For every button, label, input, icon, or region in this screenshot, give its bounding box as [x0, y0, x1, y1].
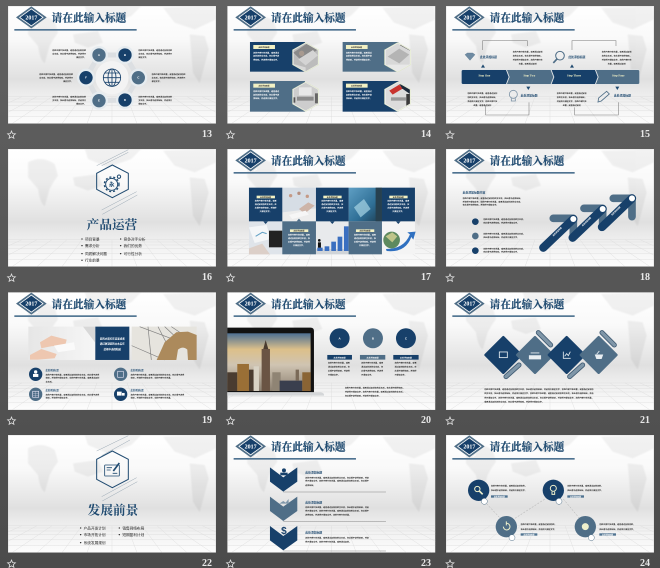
card 4: 择粘贴，并选择只保留文字。 — [346, 96, 372, 100]
text tiles: 只保留文字。 — [293, 243, 305, 247]
column labels and text: 通过复制您的文本后，在 — [395, 365, 416, 369]
text blocks: 此处添加标题 — [570, 494, 581, 498]
text blocks: 此处添加标题 — [305, 500, 322, 504]
card 4: 此处添加标题 — [351, 84, 362, 88]
bullet list: 销售网络布局 — [122, 525, 145, 530]
decorative hexagon — [97, 436, 137, 501]
text blocks: 在此框中选择粘贴，并选择只保留文字。 — [599, 527, 635, 531]
text blocks: 您的内容打在这里，或者通过复制您的 — [138, 48, 172, 52]
slide 20: laptop with city photo — [181, 292, 481, 410]
four items: 您的内容打在这里，或者通过复制您的文本后，在此框中选择 — [131, 372, 184, 376]
circles — [468, 480, 596, 541]
text tiles — [249, 188, 415, 254]
column labels and text: 您的内容打在这里，或者 — [361, 361, 383, 365]
text blocks: 此处添加标题 — [568, 55, 585, 59]
slide header — [452, 149, 575, 174]
text blocks: 您的内容打在这里，或者通过复制您的文本后，在此框中选择粘贴，并选 — [305, 475, 369, 479]
intro text: 此处添加标题内容 — [463, 190, 485, 194]
column labels and text: 通过复制您的文本后，在 — [328, 365, 350, 369]
diamond icons — [499, 351, 603, 359]
hexagon ring diagram: A — [98, 53, 101, 57]
footer row 2: stars and page numbers — [8, 272, 650, 283]
text blocks: 文本后，在此框中选择粘贴，并选择只 — [138, 51, 172, 55]
list items: 在此框中选择粘贴，并选择只保留文字。 — [483, 250, 519, 254]
centre text panel — [95, 327, 129, 360]
paragraph: 的文本后，在此框中选择粘贴，并选择只保留文字。您的内容打在这里，或者通过复制您的文本后，在此框中选择粘贴，并选 — [484, 391, 593, 395]
slide header: 请在此输入标题 — [490, 12, 565, 25]
text blocks: 您的内容打在这里，或者通过复制您的 — [52, 48, 86, 52]
column labels and text: 此框中选择粘贴，并选择 — [361, 369, 383, 373]
section title: 发展前景 — [88, 502, 139, 517]
icon: globe — [103, 69, 121, 86]
bullet list: 可行性分析 — [124, 251, 142, 256]
slide 13: hexagon ring with globe — [0, 6, 262, 124]
column labels and text: 只保留文字。 — [395, 373, 407, 377]
photo: bridge — [132, 327, 197, 360]
text blocks: 您的内容打在这里，或者通过复制您的 — [152, 72, 185, 76]
text tiles: 通过复制您的文本后，在 — [255, 202, 277, 206]
list items: 您的内容打在这里，或者通过复制您的文本后， — [483, 217, 525, 221]
footer row 1: stars and page numbers: 15 — [640, 129, 650, 140]
four items: 粘贴，并选择只保留文字。 — [46, 396, 69, 400]
diagonal labels — [506, 333, 614, 377]
slide header — [14, 6, 137, 31]
slide header: 请在此输入标题 — [490, 155, 565, 168]
slide header: 2017 — [245, 444, 257, 450]
icon: bulb — [509, 90, 517, 101]
arrows chart: 此处添加标题 — [581, 216, 592, 227]
slide 21: four diamonds — [400, 292, 660, 410]
text blocks: 您的文本后，在此框中选择粘贴， — [467, 95, 497, 99]
laptop with city photo — [227, 328, 324, 396]
text blocks: 保留文字。 — [76, 102, 86, 106]
hexagon ring diagram — [77, 46, 147, 110]
hexagon ring diagram: C — [137, 76, 140, 80]
footer row 3: stars and page numbers: 20 — [421, 415, 431, 426]
bullet list: 需求分析 — [85, 243, 100, 248]
bottom paragraph: 在此框中选择粘贴，并选择只保留文字。 — [345, 393, 381, 397]
list items: 在此框中选择粘贴，并选择只保留文字。 — [483, 235, 519, 239]
slide header: 请在此输入标题 — [271, 155, 346, 168]
icon: diamond — [465, 53, 475, 60]
photo: hands and tablet — [249, 221, 282, 254]
three circles — [330, 328, 416, 348]
text blocks: 保留文字。 — [152, 79, 162, 83]
text blocks: 您的内容打在这里，或者通过复制 — [602, 49, 632, 53]
slide 14: four cards with hexagon photos — [227, 6, 436, 124]
text blocks: 文本后，在此框中选择粘贴，并选择只 — [52, 51, 86, 55]
paragraph: 您的内容打在这里，或者通过复制您的文本后，在此框中选择粘贴，并选择只保留文字。您的内容打在这里，或者通过复制您 — [484, 387, 593, 391]
text blocks: 文本后，在此框中选择粘贴，并选择只 — [52, 98, 86, 102]
text tiles: 您的内容打在这里，或者 — [321, 199, 343, 203]
process bar: Step Three — [567, 74, 582, 78]
text blocks: 您的内容打在这里，或者通过复制 — [557, 91, 587, 95]
card 1: 复制您的文本后，在此框中选 — [253, 54, 279, 58]
hexagon ring diagram: F — [85, 76, 87, 80]
centre text panel: 此框中选择粘贴 — [104, 347, 122, 351]
section title: 产品运营 — [87, 218, 138, 232]
four items: 此处添加标题 — [131, 388, 144, 392]
text blocks: 您的内容打在这里，或者通过复制您的， — [599, 522, 635, 526]
four items: 此处添加标题 — [46, 388, 59, 392]
slide header — [234, 149, 356, 174]
card 2: 复制您的文本后，在此框中选 — [346, 54, 372, 58]
text blocks: 选择粘贴，并选择只保留文字。您的内容打在这里。 — [305, 513, 351, 517]
text blocks: 这里，或者通过复制 — [563, 103, 581, 107]
text blocks: 此处添加标题 — [305, 471, 322, 475]
intro text: 在此框中选择粘贴，并选择只保留文字。 — [463, 203, 498, 207]
text blocks — [467, 49, 632, 107]
bottom paragraph: 并选择只保留文字。您的内容打在这里，或者通过复制您的文本后， — [345, 389, 404, 393]
chevrons — [270, 467, 297, 550]
footer row 3: stars and page numbers: 21 — [640, 415, 650, 426]
text blocks: 在此框中选择粘贴，并选择只保留文字。 — [521, 527, 556, 531]
slide header: 2017 — [25, 15, 37, 21]
text blocks: 您的文本后，在此框中选择粘贴， — [602, 53, 632, 57]
slide header: 2017 — [463, 15, 475, 21]
text blocks: 您的文本后，在此框中选择粘贴， — [513, 53, 543, 57]
text blocks: 选择粘贴。 — [305, 483, 315, 487]
footer row 2: stars and page numbers: 16 — [202, 272, 212, 283]
four items: 此处添加标题 — [131, 368, 144, 372]
text blocks: 在此框中选择粘贴，并选择只保留文字。 — [491, 488, 527, 492]
text tiles: 通过复制您的文本后，在 — [354, 236, 376, 240]
text tiles: 此处添加标题 — [260, 195, 271, 199]
icon: document and pen — [105, 463, 119, 476]
text blocks: 此处添加标题 — [614, 94, 631, 98]
arrows chart: 此处添加标题 — [610, 205, 621, 216]
hexagon ring diagram: E — [98, 99, 100, 103]
paragraph: 择只保留文字。您的内容打在这里，或者通过复制您的文本后，在此框中选择粘贴，并选择只保留文字。您的内容打在这里， — [484, 395, 593, 399]
text blocks — [305, 471, 369, 543]
process bar — [461, 69, 640, 85]
text blocks: 这里，或者通过复制 — [519, 61, 537, 65]
slide header: 请在此输入标题 — [490, 441, 565, 454]
slide header: 2017 — [25, 302, 37, 308]
text blocks: 文本后，在此框中选择粘贴，并选择只 — [152, 75, 185, 79]
text tiles: 通过复制您的文本后，在 — [321, 202, 343, 206]
column labels and text: 只保留文字。 — [328, 373, 340, 377]
slide header: 2017 — [463, 158, 475, 164]
four items: 粘贴，并选择只保留文字。您的内容打在这里。 — [131, 396, 172, 400]
text blocks: 您的内容打在这里，或者通过复制 — [467, 91, 497, 95]
slide header: 请在此输入标题 — [52, 298, 127, 311]
dashed connectors — [484, 499, 580, 519]
connector arrows — [483, 41, 618, 115]
bullet list: 产品开发计划 — [84, 525, 106, 530]
slide header: 请在此输入标题 — [490, 298, 565, 311]
process bar: Step Two — [523, 74, 536, 78]
bullet list: 行业前景 — [85, 258, 100, 263]
chevron icons: $ — [281, 526, 287, 537]
column labels and text: 此处添加标题 — [367, 355, 379, 359]
column labels and text: 此处添加标题 — [400, 355, 412, 359]
bullet list — [80, 525, 145, 545]
column labels and text: 只保留文字。 — [361, 373, 373, 377]
text tiles: 此处添加标题 — [327, 195, 338, 199]
decorative hexagon — [97, 150, 137, 214]
four items: 您的内容打在这里，或者通过复制您的文本后，在此框中选择 — [46, 372, 99, 376]
slide 16: section cover 产品运营 — [0, 149, 262, 267]
bullet list: 同质解决问题 — [85, 251, 107, 256]
hexagon ring diagram: D — [124, 98, 127, 102]
card 3 — [250, 81, 319, 112]
paragraph: 或者通过复制您的文本后，在此框中选择粘贴，并选择只保留文字。 — [484, 399, 544, 403]
four items: 粘贴，并选择只保留文字。您的内容打在这里，或者通过复制 — [46, 376, 99, 380]
paragraph — [484, 387, 593, 403]
text tiles: 您的内容打在这里，或者 — [288, 233, 310, 237]
text blocks: 这里，或者通过复制 — [473, 103, 491, 107]
slide header: 2017 — [245, 158, 257, 164]
icon: gear: 永 — [109, 180, 115, 188]
text blocks: 这里，或者通过复制 — [608, 61, 626, 65]
four items: 您的内容打在这里，或者通过复制您的文本后，在此框中选择 — [46, 392, 99, 396]
intro text — [463, 190, 522, 207]
text blocks: 并选择只保留文字。您的内容打在 — [467, 99, 497, 103]
bottom paragraph: 您的内容打在这里，或者通过复制您的文本后，在此框中选择粘贴， — [345, 385, 404, 389]
centre text panel: 您的内容打在这里或者 — [100, 336, 125, 340]
four items: 此处添加标题 — [46, 368, 59, 372]
photo: hands on laptop — [282, 188, 316, 221]
slide 23: chevron list — [181, 435, 481, 553]
text blocks: 您的内容打在这里，或者通过复制您的， — [491, 484, 527, 488]
text blocks: 您的内容打在这里，或者通过复制您的文本后，在此框中选择粘贴，并选 — [305, 535, 369, 539]
text blocks: 择只保留文字。您的内容打在这里，或者通过复制您的文本后，在此框中 — [305, 479, 369, 483]
text tiles: 您的内容打在这里，或者 — [387, 199, 409, 203]
list items: 您的内容打在这里，或者通过复制您的文本后， — [483, 246, 525, 250]
footer row 1: stars and page numbers: 14 — [421, 129, 431, 140]
intro text: 并选择只保留文字。您的内容打在这里，或者通过复制您的文本后， — [463, 199, 522, 203]
slide 19: photos and four items — [0, 292, 262, 410]
card 2 — [343, 42, 411, 72]
text blocks: 您的文本后，在此框中选择粘贴， — [557, 95, 587, 99]
text blocks: 您的内容打在这里，或者通过复制您的， — [567, 484, 603, 488]
bullet list: 竞争对手分析 — [124, 236, 146, 241]
slide header: 请在此输入标题 — [271, 441, 346, 454]
diamonds row — [486, 337, 616, 373]
text blocks: 您的内容打在这里，或者通过复制您的 — [138, 95, 172, 99]
text tiles: 只保留文字。 — [392, 209, 404, 213]
bullet list: 我们的优势 — [124, 243, 142, 248]
slide 22: section cover 发展前景 — [0, 435, 262, 553]
text blocks: 并选择只保留文字。您的内容打在 — [602, 57, 632, 61]
slide header: 2017 — [463, 302, 475, 308]
slide header — [452, 435, 575, 460]
text blocks: 保留文字。 — [63, 79, 73, 83]
text blocks: 并选择只保留文字。您的内容打在 — [557, 99, 587, 103]
text blocks: 在此框中选择粘贴，并选择只保留文字。 — [567, 488, 603, 492]
circle icons — [475, 485, 588, 530]
slide header — [234, 6, 356, 31]
intro text: 您的内容打在这里，或者通过复制您的文本后，在此框中选择粘贴， — [463, 196, 522, 200]
slide header — [452, 6, 575, 31]
text blocks: 此处添加标题 — [521, 94, 538, 98]
card 3: 您的内容打在这里，或者通过 — [253, 89, 279, 93]
text blocks: 择只保留文字。您的内容打在这里，或者通过复制。 — [305, 539, 351, 543]
text blocks — [39, 48, 185, 106]
slide 17: photo and text mosaic — [181, 149, 481, 267]
text blocks: 保留文字。 — [76, 55, 86, 59]
photo: hands on keyboard — [28, 327, 95, 360]
text tiles: 只保留文字。 — [326, 209, 338, 213]
slide header — [14, 293, 137, 317]
four items: 粘贴，并选择只保留文字。您的内容打在这里。 — [131, 376, 172, 380]
process bar: Step One — [478, 74, 491, 78]
footer row 1: stars and page numbers: 13 — [202, 129, 212, 140]
bullet list: 市场开拓计划 — [84, 532, 106, 537]
slide header: 请在此输入标题 — [271, 298, 346, 311]
text blocks: 择只保留文字。您的内容打在这里，或者通过复制您的文本后，在此框中 — [305, 509, 369, 513]
card 1: 此处添加标题 — [258, 45, 270, 49]
text blocks: 此处添加标题 — [602, 532, 613, 536]
column labels and text — [327, 355, 419, 377]
chevron icons — [279, 468, 289, 537]
list items: 在此框中选择粘贴，并选择只保留文字。 — [483, 220, 519, 224]
divider lines — [283, 492, 386, 551]
card 1: 择粘贴，并选择只保留文字。 — [253, 57, 279, 61]
bottom paragraph — [345, 385, 404, 397]
icon: gear — [104, 175, 121, 192]
slide header — [452, 293, 575, 317]
icon: pencil — [598, 91, 609, 102]
bullet list: 项目背景 — [85, 236, 100, 241]
photo: blue tablet — [349, 188, 382, 221]
text blocks: 此处添加标题 — [480, 55, 497, 59]
card 4 — [343, 81, 411, 112]
text tiles: 只保留文字。 — [260, 209, 272, 213]
slide header — [234, 293, 356, 317]
text blocks: 保留文字。 — [138, 102, 148, 106]
four items — [29, 368, 184, 401]
slide 18: rising arrows — [400, 149, 660, 267]
column labels and text: 您的内容打在这里，或者 — [328, 361, 350, 365]
list items: 您的内容打在这里，或者通过复制您的文本后， — [483, 232, 525, 236]
slide header: 请在此输入标题 — [271, 12, 346, 25]
text blocks: 此处添加标题 — [494, 494, 505, 498]
bullet list: 系统发展规划 — [84, 540, 106, 545]
text tiles: 通过复制您的文本后，在 — [387, 202, 409, 206]
column labels and text: 此框中选择粘贴，并选择 — [328, 369, 350, 373]
text blocks: 您的内容打在这里，或者通过复制您的 — [39, 72, 73, 76]
bullet list — [81, 236, 146, 263]
three circles: B — [372, 336, 375, 340]
arrows chart — [543, 195, 635, 248]
text tiles: 只保留文字。 — [359, 243, 371, 247]
text tiles: 此框中选择粘贴，并选择 — [255, 206, 277, 210]
slide 15: four-step process bar — [400, 6, 660, 124]
footer row 3: stars and page numbers — [8, 415, 650, 426]
three circles: C — [405, 336, 408, 340]
list items — [472, 217, 525, 254]
footer row 2: stars and page numbers: 17 — [421, 272, 431, 283]
column labels and text: 通过复制您的文本后，在 — [361, 365, 383, 369]
slide header: 2017 — [463, 444, 475, 450]
text tiles: 此处添加标题 — [393, 195, 404, 199]
three circles: A — [339, 336, 342, 340]
slide 24: zigzag circles — [400, 435, 660, 553]
card 2: 此处添加标题 — [351, 45, 362, 49]
column labels and text: 此处添加标题 — [334, 355, 346, 359]
text tiles: 此框中选择粘贴，并选择 — [321, 206, 343, 210]
card 2: 您的内容打在这里，或者通过 — [346, 50, 372, 54]
card 2: 择粘贴，并选择只保留文字。 — [346, 57, 372, 61]
photo: globe with arrow — [382, 221, 416, 254]
text blocks: 您的内容打在这里，或者通过复制您的 — [52, 95, 86, 99]
four items: 文本后。 — [46, 379, 54, 383]
footer row 2: stars and page numbers: 18 — [640, 272, 650, 283]
text tiles: 通过复制您的文本后，在 — [288, 236, 310, 240]
text blocks: 保留文字。 — [138, 55, 148, 59]
markers — [481, 64, 619, 90]
process bar: Step Four — [612, 74, 625, 78]
text tiles: 此框中选择粘贴，并选择 — [354, 240, 376, 244]
text tiles: 您的内容打在这里，或者 — [354, 233, 376, 237]
text blocks — [491, 484, 635, 536]
text blocks: 您的内容打在这里，或者通过复制您的， — [521, 522, 556, 526]
hexagon ring diagram: B — [124, 53, 127, 57]
text blocks: 您的内容打在这里，或者通过复制您的文本后，在此框中选择粘贴，并选 — [305, 505, 369, 509]
text blocks: 此处添加标题 — [523, 532, 535, 536]
footer row 3: stars and page numbers: 19 — [202, 415, 212, 426]
card 3: 复制您的文本后，在此框中选 — [253, 92, 279, 96]
four items: 您的内容打在这里，或者通过复制您的文本后，在此框中选择 — [131, 392, 184, 396]
card 1 — [250, 42, 319, 72]
footer row 1: stars and page numbers — [8, 129, 650, 140]
slide header — [234, 435, 356, 460]
footer row 4: stars and page numbers — [8, 558, 650, 568]
text blocks: 文本后，在此框中选择粘贴，并选择只 — [138, 98, 172, 102]
column labels and text: 您的内容打在这里，或者 — [395, 361, 416, 365]
slide header: 2017 — [245, 302, 257, 308]
text tiles: 您的内容打在这里，或者 — [255, 199, 277, 203]
slide header: 2017 — [245, 15, 257, 21]
card 3: 此处添加标题 — [258, 84, 270, 88]
text blocks: 并选择只保留文字。您的内容打在 — [513, 57, 543, 61]
icon: magnifier — [553, 51, 564, 63]
text tiles: 此处添加标题 — [359, 228, 371, 232]
text tiles: 此处添加标题 — [293, 228, 305, 232]
bullet list: 短期盈利计划 — [122, 532, 145, 537]
card 3: 择粘贴，并选择只保留文字。 — [253, 96, 279, 100]
column labels and text: 此框中选择粘贴，并选择 — [395, 369, 416, 373]
text blocks: 文本后，在此框中选择粘贴，并选择只 — [39, 75, 73, 79]
centre text panel: 通过复制您的文本后在 — [100, 341, 125, 345]
arrows chart: 此处添加标题 — [551, 226, 563, 237]
text blocks: 您的内容打在这里，或者通过复制 — [513, 49, 543, 53]
card 1: 您的内容打在这里，或者通过 — [253, 50, 279, 54]
card 4: 您的内容打在这里，或者通过 — [346, 89, 372, 93]
slide header: 请在此输入标题 — [52, 12, 127, 25]
photo: person on bar chart — [316, 221, 349, 254]
text tiles: 此框中选择粘贴，并选择 — [288, 240, 310, 244]
card 4: 复制您的文本后，在此框中选 — [346, 92, 372, 96]
text tiles: 此框中选择粘贴，并选择 — [387, 206, 409, 210]
text blocks: 此处添加标题 — [305, 531, 322, 535]
